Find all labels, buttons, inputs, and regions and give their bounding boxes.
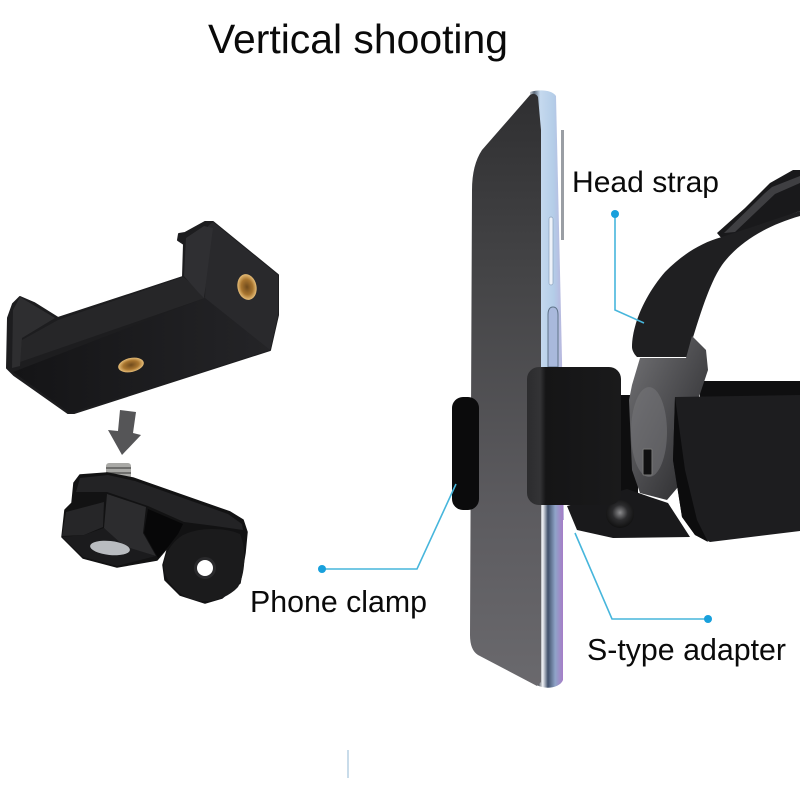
small vertical mark [347, 750, 349, 778]
phone metal edge upper [530, 90, 564, 520]
mount silhouette [62, 473, 247, 603]
upper head strap [632, 211, 800, 357]
callout: head strap [572, 166, 719, 323]
label: Head strap [572, 166, 719, 199]
leader line [615, 214, 644, 323]
strap rim [673, 397, 708, 542]
rear horizontal strap [700, 381, 800, 401]
leader line [575, 533, 708, 619]
front horizontal strap [673, 395, 800, 542]
clamp rounded corner [184, 226, 213, 298]
mount round lug [164, 529, 244, 601]
clamp ridged jaw [12, 297, 55, 368]
phone screen [470, 94, 541, 686]
leader dot [704, 615, 712, 623]
mount top plate sheen [76, 475, 243, 530]
leader dot [318, 565, 326, 573]
buckle slot [643, 449, 652, 475]
clamp inner long face [20, 277, 205, 362]
phone side button [549, 217, 553, 285]
clamp knob [452, 397, 479, 510]
head strap assembly [567, 170, 800, 542]
upper buckle highlight [724, 176, 800, 233]
arrow: down [108, 410, 141, 455]
brass insert: side [235, 272, 259, 302]
label: S-type adapter [587, 634, 786, 667]
mount screw head [89, 539, 131, 557]
label: Phone clamp [250, 586, 427, 619]
metal buckle plate [629, 336, 708, 500]
brass insert: front [117, 355, 145, 375]
leader dot [611, 210, 619, 218]
upper strap buckle [717, 170, 800, 240]
mount lower face [62, 528, 156, 566]
plate highlight oval [631, 387, 667, 477]
leader line [322, 484, 456, 569]
adapter ball screw [606, 500, 634, 528]
clamp side face [205, 222, 278, 350]
strap behind plate [618, 395, 638, 493]
clamp front face [13, 298, 270, 413]
title: Vertical shooting [208, 16, 508, 62]
clamp outer silhouette [7, 222, 278, 413]
phone metal edge lower [537, 505, 563, 688]
phone [452, 90, 621, 688]
callout: phone clamp [250, 484, 456, 619]
callout: S-type adapter [575, 533, 786, 667]
phone lower button [548, 307, 558, 367]
phone camera bump [561, 130, 564, 240]
mount centre block [104, 494, 156, 556]
phone clamp product photo [7, 222, 278, 413]
mount screw [106, 463, 131, 479]
clamp block [527, 367, 621, 505]
mount slot [144, 509, 183, 558]
S-type mount product photo [62, 463, 247, 603]
lower adapter [567, 489, 690, 538]
mount left block [62, 502, 104, 536]
mount hole [196, 558, 214, 578]
